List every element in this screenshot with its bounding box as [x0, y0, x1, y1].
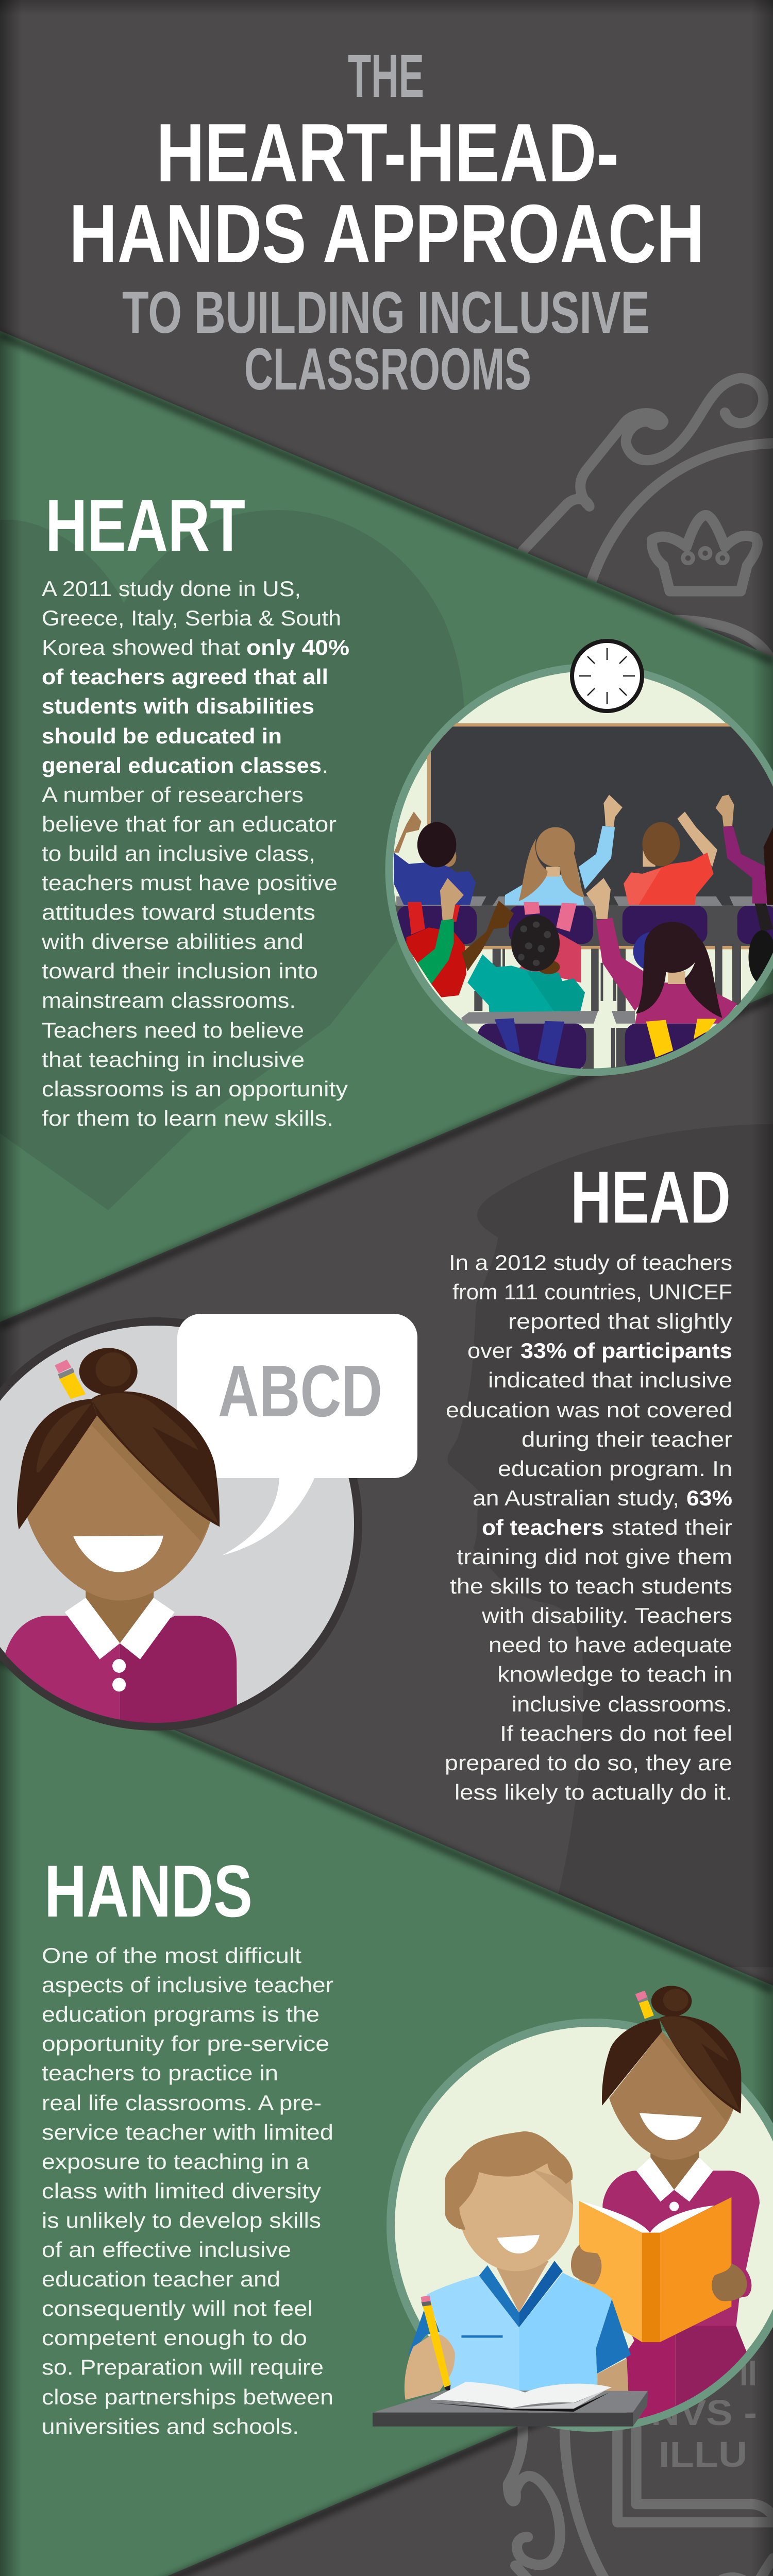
text block: heart body: classrooms is an opportunity: [42, 1077, 348, 1101]
title: HEART-HEAD-: [156, 107, 619, 199]
text block: heart body: Greece, Italy, Serbia & South: [42, 606, 341, 630]
watermark: heart: [0, 510, 465, 1210]
heading: hands: HANDS: [44, 1851, 253, 1933]
text block: head body: prepared to do so, they are: [445, 1751, 732, 1775]
text block: hands body: education programs is the: [42, 2002, 320, 2026]
watermark: hand: [0, 1773, 387, 2497]
text block: head body: 33% of participants: [520, 1338, 732, 1363]
title: CLASSROOMS: [244, 336, 531, 402]
text block: head body: inclusive classrooms.: [512, 1692, 732, 1716]
text block: head body: stated their: [612, 1515, 732, 1539]
speech bubble: ABCD: [218, 1350, 382, 1432]
teacher head and book: [571, 1986, 747, 2342]
watermark: head silhouette: [447, 1124, 773, 1967]
watermark: crest lettering: NVS -: [651, 2393, 757, 2433]
text block: heart body: of teachers agreed that all: [42, 665, 328, 689]
watermark: crest lettering: ILLU: [659, 2434, 747, 2475]
desk with notebook: [373, 2382, 648, 2427]
text block: head body: 63%: [686, 1486, 732, 1510]
text block: heart body: Korea showed that: [42, 635, 240, 659]
teacher shirt: [5, 1616, 237, 1723]
text block: hands body: of an effective inclusive: [42, 2238, 291, 2262]
text block: hands body: so. Preparation will require: [42, 2355, 324, 2379]
text block: hands body: [42, 1943, 333, 2438]
illustration: teacher and student: [373, 1986, 773, 2441]
text block: head body: education program. In: [498, 1456, 732, 1481]
text block: heart body: .: [322, 753, 328, 777]
text block: heart body: should be educated in: [42, 724, 282, 748]
text block: heart body: [41, 577, 349, 1130]
watermark: crest top: [523, 378, 773, 664]
panel: hands green band: [0, 1655, 773, 2576]
speech bubble: [177, 1314, 417, 1555]
text block: heart body: to build an inclusive class,: [42, 841, 315, 866]
text block: head body: indicated that inclusive: [488, 1368, 732, 1392]
text block: hands body: teachers to practice in: [42, 2061, 278, 2085]
text block: hands body: One of the most difficult: [42, 1943, 301, 1968]
text block: head body: knowledge to teach in: [497, 1662, 732, 1686]
teacher face: [17, 1348, 220, 1691]
text block: hands body: is unlikely to develop skills: [42, 2208, 321, 2232]
illustration: classroom: [389, 641, 773, 1072]
text block: hands body: opportunity for pre-service: [42, 2031, 329, 2056]
text block: head body: In a 2012 study of teachers: [449, 1250, 732, 1275]
text block: heart body: attitudes toward students: [42, 900, 315, 924]
text block: head body: If teachers do not feel: [500, 1721, 732, 1745]
text block: head body: from 111 countries, UNICEF: [452, 1280, 732, 1304]
student: teal shirt: [462, 901, 585, 1024]
text block: hands body: universities and schools.: [42, 2414, 299, 2438]
text block: head body: training did not give them: [457, 1545, 732, 1569]
teacher dress: [602, 2171, 760, 2441]
text block: heart body: mainstream classrooms.: [42, 988, 296, 1012]
scene: students in class: [394, 723, 773, 1070]
text block: heart body: A 2011 study done in US,: [42, 577, 301, 601]
text block: hands body: consequently will not feel: [42, 2296, 313, 2320]
text block: heart body: that teaching in inclusive: [42, 1047, 305, 1072]
text block: hands body: competent enough to do: [42, 2326, 307, 2350]
text block: hands body: real life classrooms. A pre-: [42, 2091, 322, 2115]
text block: heart body: teachers must have positive: [42, 871, 338, 895]
text block: head body: during their teacher: [522, 1427, 732, 1451]
watermark: crest lettering: [651, 2353, 757, 2475]
text block: heart body: general education classes: [42, 753, 322, 777]
text block: heart body: only 40%: [246, 635, 349, 659]
text block: heart body: Teachers need to believe: [42, 1018, 304, 1042]
illustration: teacher with speech bubble: [0, 1314, 417, 1740]
text block: head body: less likely to actually do it.: [455, 1780, 732, 1804]
text block: head body: need to have adequate: [489, 1633, 732, 1657]
student: blue shirt: [394, 811, 476, 905]
text block: hands body: service teacher with limited: [42, 2120, 333, 2144]
icon: wall clock: [572, 641, 642, 711]
text block: head body: an Australian study,: [473, 1486, 679, 1510]
text block: head body: the skills to teach students: [450, 1574, 732, 1598]
student: magenta shirt: [586, 878, 737, 1024]
watermark: crest lettering: II: [740, 2353, 757, 2393]
text block: hands body: class with limited diversity: [42, 2179, 321, 2203]
text block: head body: of teachers: [482, 1515, 604, 1539]
text block: heart body: believe that for an educator: [42, 812, 337, 836]
text block: heart body: for them to learn new skills.: [42, 1106, 333, 1130]
text block: heart body: students with disabilities: [42, 694, 314, 718]
text block: hands body: exposure to teaching in a: [42, 2149, 310, 2174]
title: [69, 42, 704, 402]
watermark: crest bottom: [508, 2428, 773, 2576]
panel: heart green band: [0, 331, 773, 1322]
text block: heart body: toward their inclusion into: [42, 959, 318, 983]
student: purple right: [716, 794, 773, 984]
text block: head body: over: [467, 1338, 513, 1363]
student: red backpack and green arm: [406, 878, 466, 997]
text block: head body: education was not covered: [446, 1398, 732, 1422]
heading: heart: HEART: [45, 485, 245, 567]
text block: hands body: aspects of inclusive teacher: [42, 1973, 333, 1997]
student: red shirt: [624, 811, 717, 905]
text block: hands body: close partnerships between: [42, 2385, 333, 2409]
text block: head body: [445, 1250, 732, 1804]
student: pigtails light blue: [505, 794, 623, 905]
title: THE: [348, 42, 424, 110]
text block: head body: with disability. Teachers: [481, 1603, 732, 1628]
text block: heart body: A number of researchers: [42, 783, 304, 807]
text block: heart body: with diverse abilities and: [41, 929, 304, 954]
text block: head body: reported that slightly: [508, 1309, 732, 1333]
text block: hands body: education teacher and: [42, 2267, 280, 2291]
student boy: [405, 2131, 631, 2400]
